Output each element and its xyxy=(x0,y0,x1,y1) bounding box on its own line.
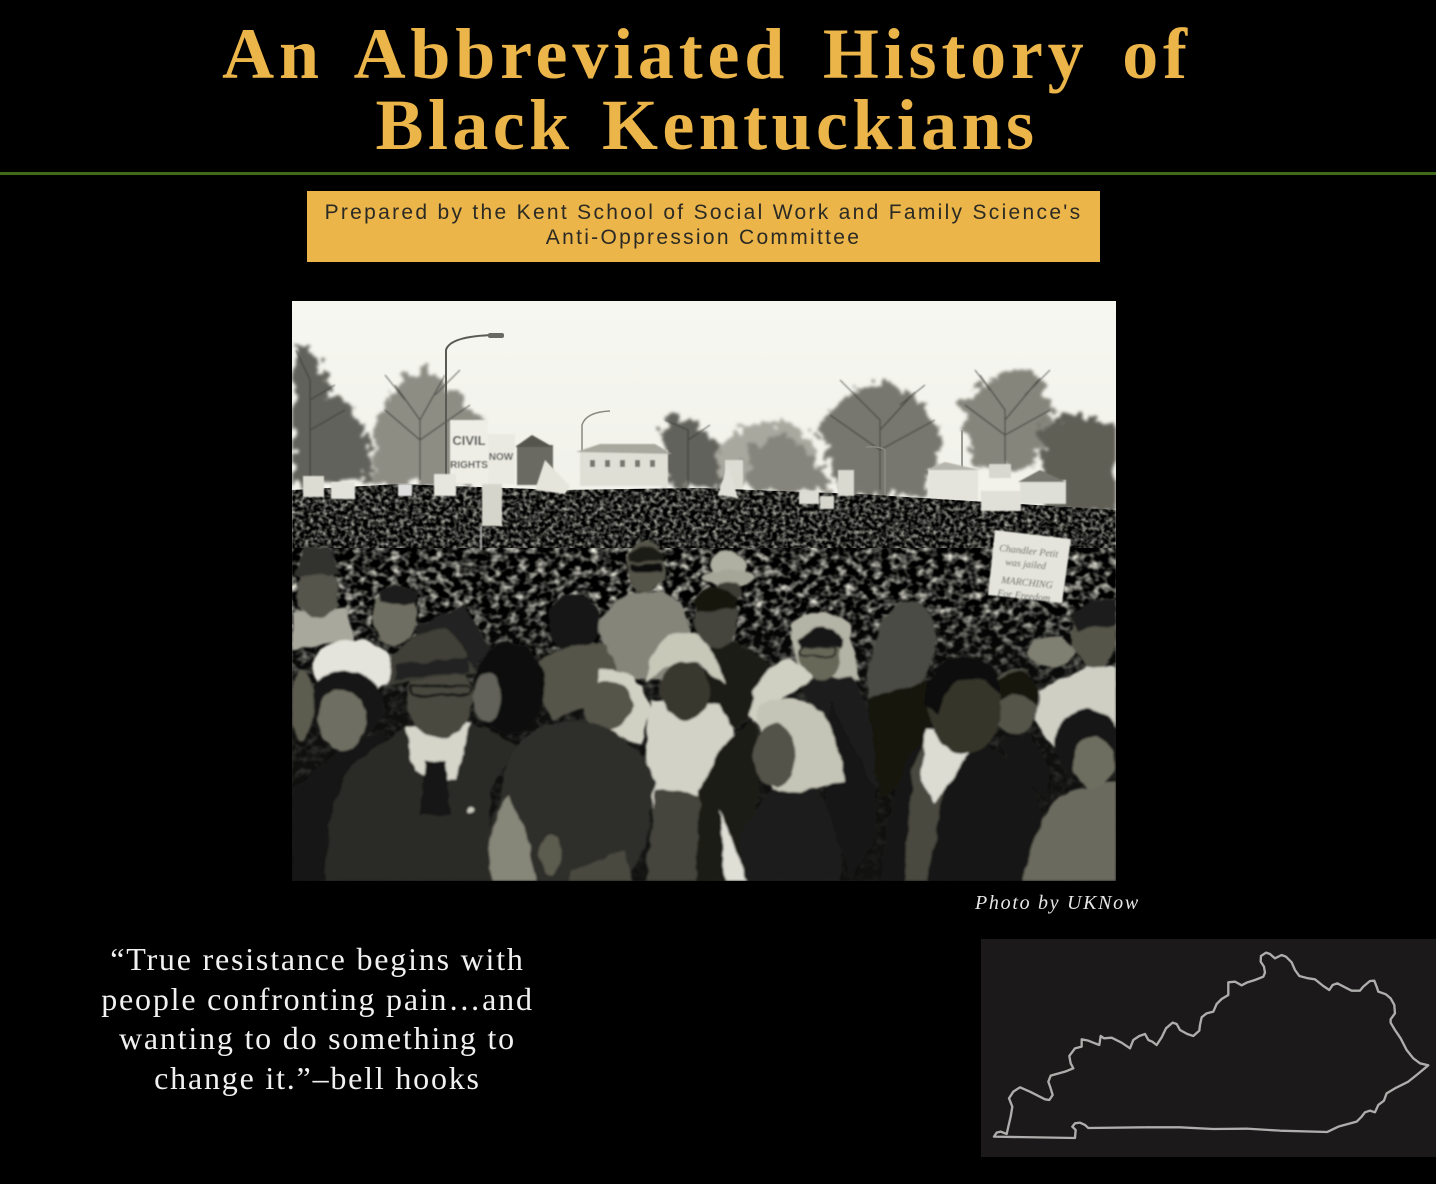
bun hair woman xyxy=(540,594,618,720)
man in glasses xyxy=(373,585,490,670)
quote: “True resistance begins with xyxy=(110,941,525,977)
subtitle banner: Anti-Oppression Committee xyxy=(546,226,861,249)
protest signs: CIVIL xyxy=(452,433,486,448)
white headwrap behind xyxy=(695,660,812,890)
title xyxy=(222,14,1192,165)
subtitle banner xyxy=(307,191,1100,262)
protest signs: NOW xyxy=(489,452,514,463)
green divider line xyxy=(0,172,1436,175)
woman in headscarf xyxy=(720,699,878,890)
white shirt man, right edge xyxy=(1035,599,1125,755)
curly-hair woman xyxy=(1022,709,1125,890)
protest signs: Chandler Petit xyxy=(999,543,1059,560)
quote: wanting to do something to xyxy=(119,1020,516,1056)
man with hat, upper left xyxy=(292,545,355,650)
patterned hat xyxy=(1028,637,1076,667)
protest signs: MARCHING xyxy=(1000,575,1053,591)
foreground man back of head xyxy=(488,720,655,890)
hooded woman xyxy=(582,670,650,745)
quote xyxy=(101,941,534,1096)
man in hat and overcoat xyxy=(325,630,520,890)
man in pale hat xyxy=(701,550,755,602)
photo credit: Photo by UKNow xyxy=(975,892,1140,914)
quote: people confronting pain…and xyxy=(101,980,534,1016)
woman with glasses and white hood xyxy=(790,612,876,790)
man with sunglasses in tan coat xyxy=(598,540,692,680)
street lamp xyxy=(446,335,495,475)
protest signs: RIGHTS xyxy=(450,460,488,471)
foreground figures xyxy=(290,540,1125,890)
protest signs: was jailed xyxy=(1005,557,1047,572)
Kentucky state outline path xyxy=(994,953,1428,1138)
protest signs: For Freedom xyxy=(996,588,1051,605)
dark-hair woman xyxy=(473,642,546,734)
man with pipe-side face xyxy=(990,669,1050,800)
crowd background xyxy=(292,484,1116,881)
protest signs xyxy=(303,420,1071,605)
quote: change it.”–bell hooks xyxy=(154,1060,481,1096)
fluffy-hat woman xyxy=(290,640,393,881)
woman in bucket hat xyxy=(645,632,735,890)
title: Black Kentuckians xyxy=(376,85,1038,165)
dark coat man xyxy=(694,588,778,730)
title: An Abbreviated History of xyxy=(222,14,1192,94)
man in dark coat xyxy=(880,655,1045,890)
photo: civil rights march crowd xyxy=(292,301,1116,881)
map: Kentucky outline xyxy=(981,939,1436,1157)
grey headscarf figure xyxy=(866,600,936,800)
subtitle banner: Prepared by the Kent School of Social Work and Family Science's xyxy=(325,201,1082,224)
